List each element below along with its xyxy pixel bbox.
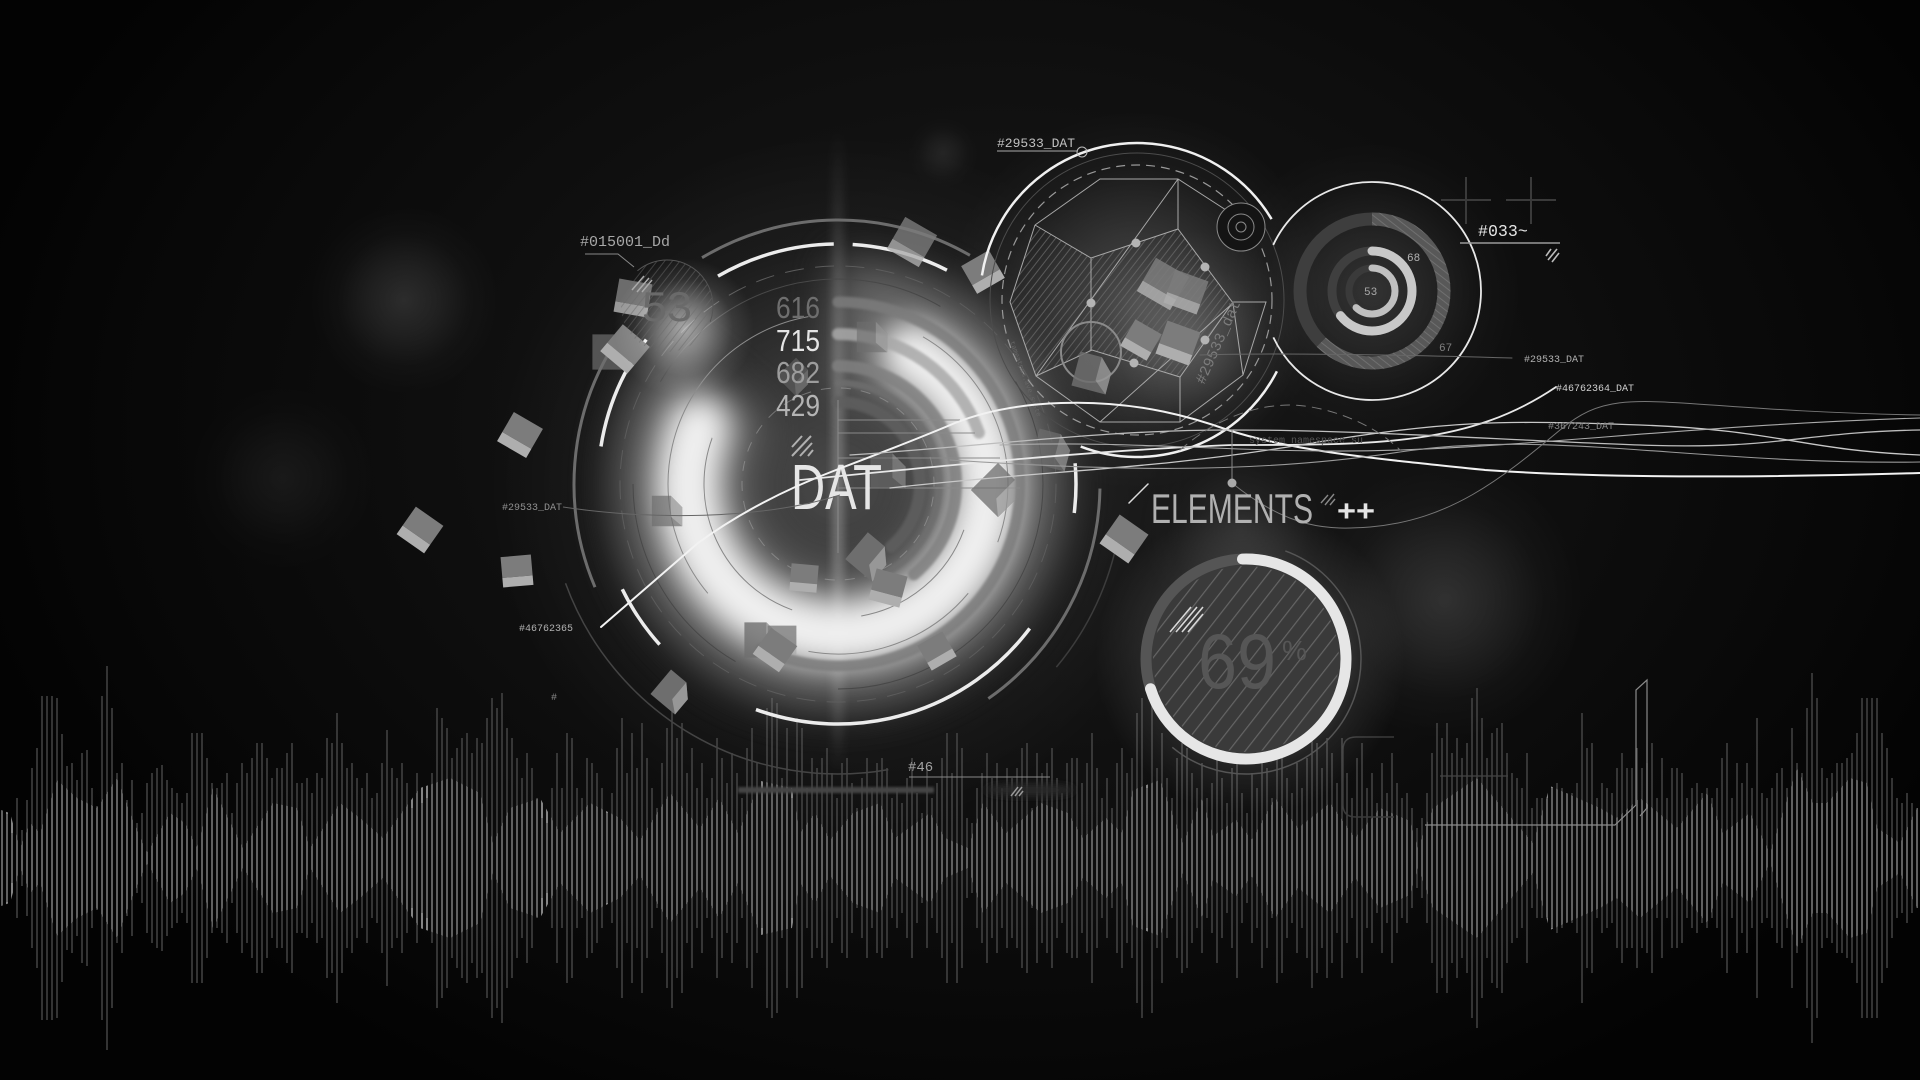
polyhedron lines <box>1010 179 1266 422</box>
vertical light beam <box>832 130 844 770</box>
thin rings <box>502 148 1174 820</box>
gauge value 69%: % <box>1282 635 1307 666</box>
right gauge values <box>1364 253 1452 355</box>
cubes: main cluster <box>592 217 1149 715</box>
title DAT: DAT <box>791 451 882 523</box>
hatched polyhedron <box>1010 225 1233 377</box>
flow labels: #367243_DAT <box>1548 422 1614 433</box>
gray outer arcs <box>476 122 1200 846</box>
hatch icon <box>792 436 813 456</box>
concentric data arcs <box>656 302 1020 666</box>
audio waveform <box>0 666 1920 1050</box>
label #015001_Dd <box>580 234 670 267</box>
bottom horizontal flare <box>738 784 1075 796</box>
bright outer arcs <box>499 145 1177 823</box>
node dots <box>1086 238 1210 368</box>
label #033~: #033~ <box>1478 222 1528 241</box>
right gauge values: 53 <box>1364 287 1377 299</box>
gauge numbers: 715 <box>776 323 820 358</box>
main radial gauge <box>476 122 1200 846</box>
percentage gauge 69% <box>1095 505 1405 815</box>
right concentric gauge <box>1227 146 1517 436</box>
polygon globe panel <box>926 89 1348 511</box>
cubes: scattered left <box>397 412 543 587</box>
flow lines <box>601 354 1920 627</box>
gauge value 69%: 69 <box>1198 617 1276 705</box>
bracket frame lower right <box>1343 680 1647 825</box>
gauge numbers <box>776 290 820 423</box>
gauge numbers: 682 <box>776 355 820 390</box>
background glow blobs <box>187 110 1585 834</box>
left labels: #29533_DAT <box>502 503 562 514</box>
globe labels: tameatpes.ave.syste <box>1007 340 1042 418</box>
cubes inside globe <box>1071 258 1209 395</box>
globe labels <box>997 136 1245 418</box>
flow labels: system namespace su <box>1249 436 1363 447</box>
label #015001_Dd: #015001_Dd <box>580 234 670 251</box>
right gauge values: 68 <box>1407 253 1420 265</box>
flow labels <box>1249 355 1634 447</box>
small data circle 53 <box>602 241 754 398</box>
left labels: # <box>551 693 557 704</box>
label #46: #46 <box>908 760 933 776</box>
center crosshair lines <box>838 400 1020 553</box>
flow labels: #29533_DAT <box>1524 355 1584 366</box>
ELEMENTS heading: ++ <box>1337 495 1375 528</box>
gauge numbers: 616 <box>776 290 820 325</box>
left labels: #46762365 <box>519 624 573 635</box>
right gauge values: 67 <box>1439 343 1452 355</box>
small data circle 53: 53 <box>642 283 692 330</box>
ELEMENTS heading: ELEMENTS <box>1151 485 1313 532</box>
flow labels: #46762364_DAT <box>1556 384 1634 395</box>
label #46 <box>908 760 1050 796</box>
globe labels: #29533_dat <box>1193 298 1245 387</box>
crosses <box>1441 177 1556 224</box>
gauge numbers: 429 <box>776 388 820 423</box>
glow band <box>633 279 1043 689</box>
circle rings <box>990 153 1284 447</box>
corner dial <box>1217 203 1265 251</box>
label #033~ <box>1460 222 1560 262</box>
left labels <box>502 495 840 704</box>
globe labels: #29533_DAT <box>997 136 1075 151</box>
